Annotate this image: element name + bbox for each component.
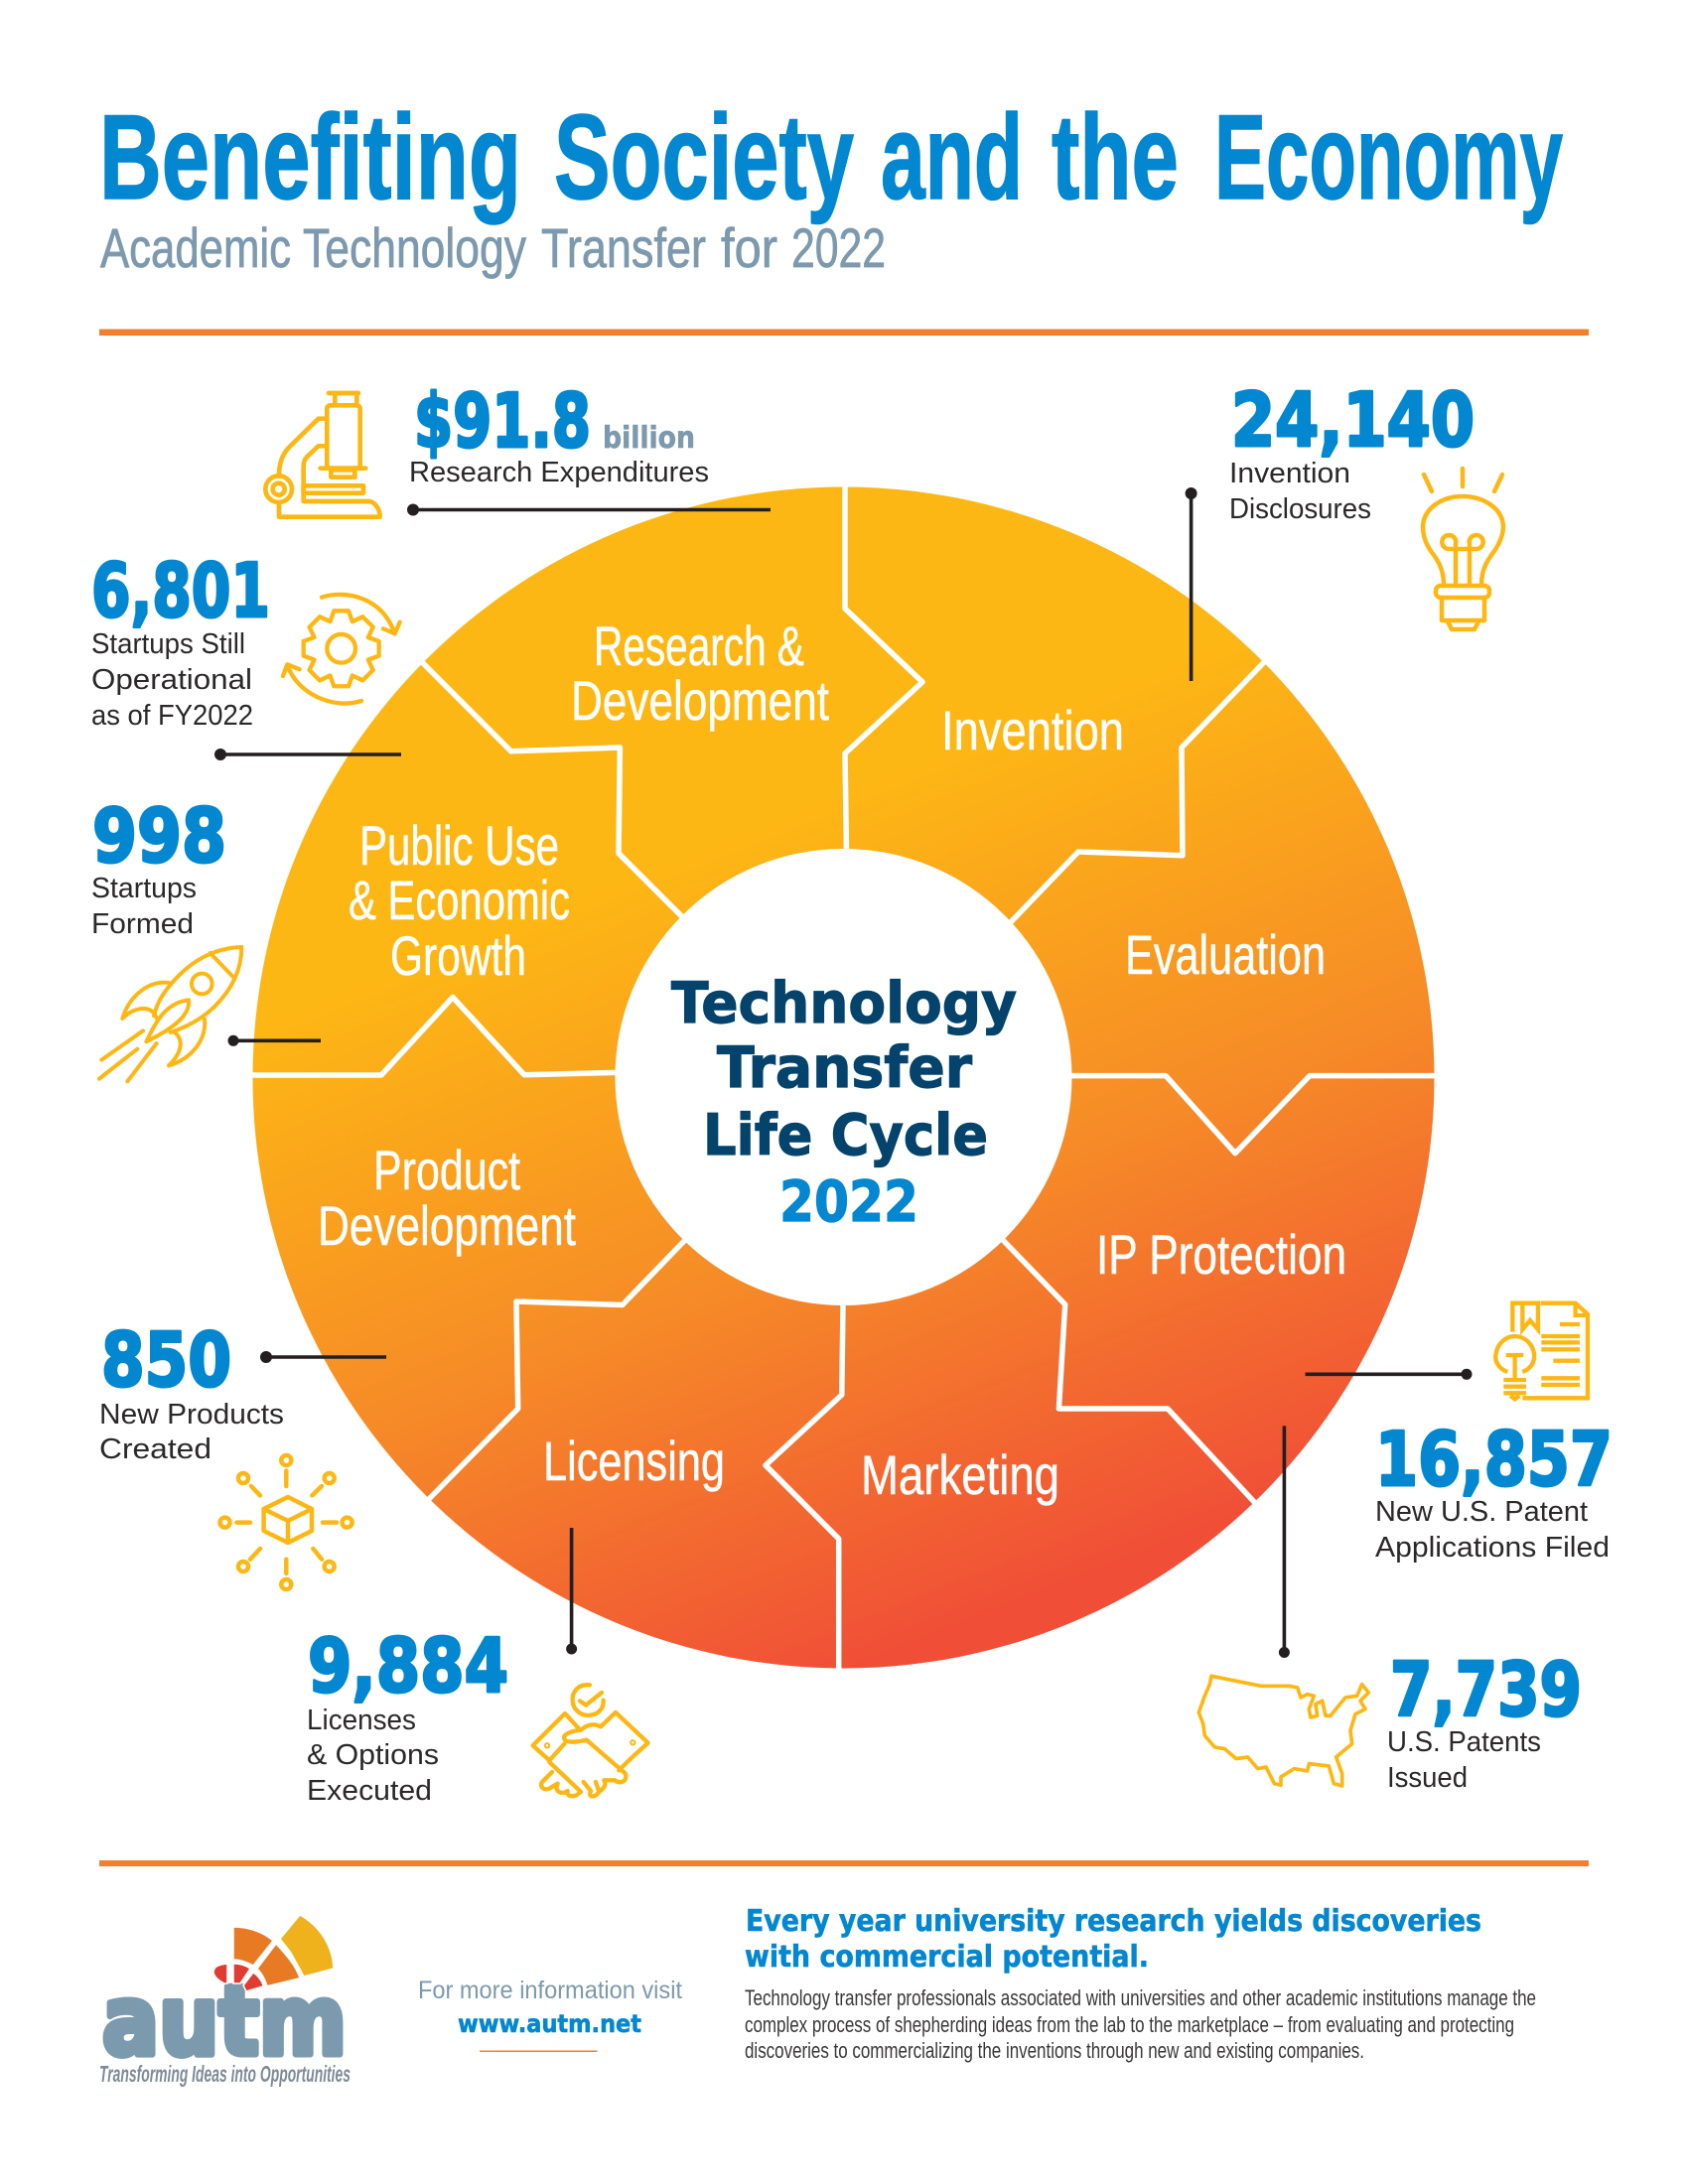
stat: new patent applications: Applications Filed [1375, 1532, 1610, 1564]
bottom divider [99, 1860, 1589, 1866]
subtitle: Academic [100, 216, 291, 279]
stat: new products created: 850 [101, 1316, 231, 1404]
footer paragraph [745, 1985, 1536, 2063]
center heading [671, 971, 1017, 1235]
stat: startups formed: Formed [91, 908, 194, 940]
icon: patent document with bulb [1495, 1303, 1588, 1399]
stage: public use and economic growth [349, 814, 570, 987]
title: the [1052, 89, 1179, 224]
stat: licenses and options: Licenses [307, 1705, 416, 1736]
stage: product development: Product [373, 1139, 520, 1201]
stage: licensing: Licensing [543, 1430, 725, 1492]
stat: new patent applications: New U.S. Patent [1375, 1496, 1588, 1528]
stat: new patent applications: 16,857 [1375, 1416, 1613, 1503]
stat: startups still operational: Startups Still [91, 628, 245, 660]
stat: licenses and options: Executed [307, 1775, 432, 1807]
stat: patents issued: 7,739 [1390, 1646, 1582, 1733]
stat: invention disclosures: Invention [1229, 458, 1350, 489]
stat: new products created: New Products [99, 1399, 284, 1431]
stage: invention: Invention [941, 699, 1124, 761]
leader: patent applications [1305, 1369, 1472, 1380]
stage: research and development [571, 614, 829, 732]
stat: licenses and options: 9,884 [308, 1622, 508, 1709]
leader: new products created [260, 1351, 386, 1363]
stat: startups still operational: as of FY2022 [91, 700, 253, 732]
stat: research expenditures: billion [603, 421, 695, 456]
logo wordmark: autm [102, 1966, 347, 2077]
title: Benefiting [99, 89, 521, 224]
stat: startups formed: 998 [92, 792, 226, 880]
leader: invention disclosures [1186, 487, 1197, 681]
icon: handshake [533, 1685, 648, 1796]
stat: invention disclosures: Disclosures [1229, 493, 1371, 525]
leader: patents issued [1279, 1426, 1290, 1658]
title: Society [554, 89, 854, 224]
stage: public use and economic growth: Growth [390, 924, 526, 987]
center heading: Life Cycle [703, 1103, 988, 1168]
stat: research expenditures [409, 377, 709, 488]
stat: research expenditures: Research Expenditures [409, 457, 709, 488]
stat: startups formed: Startups [91, 873, 197, 904]
icon: microscope [265, 393, 380, 517]
stage: research and development: Research & [594, 614, 804, 677]
center heading: 2022 [779, 1169, 918, 1235]
footer statement: Every year university research yields discoveries [746, 1904, 1481, 1939]
more information: For more information visit [418, 1977, 682, 2004]
footer paragraph: discoveries to commercializing the inventions through new and existing companies. [745, 2038, 1364, 2063]
stat: invention disclosures [1229, 376, 1475, 525]
stat: licenses and options [307, 1622, 508, 1807]
icon: gear with cycle arrows [283, 595, 400, 704]
footer statement: with commercial potential. [745, 1940, 1149, 1975]
title: and [881, 89, 1023, 224]
stat: licenses and options: & Options [307, 1739, 439, 1771]
icon: rocket [99, 947, 241, 1081]
stat: invention disclosures: 24,140 [1231, 376, 1475, 464]
icon: USA map [1198, 1676, 1368, 1786]
stat: patents issued: Issued [1387, 1762, 1468, 1794]
subtitle [100, 216, 886, 279]
logo tagline: Transforming Ideas into Opportunities [99, 2061, 351, 2087]
subtitle: for [721, 216, 777, 279]
stage: IP protection: IP Protection [1096, 1223, 1346, 1286]
footer logo [99, 1915, 351, 2087]
stat: patents issued: U.S. Patents [1387, 1726, 1541, 1758]
life cycle wheel [249, 484, 1437, 1671]
stat: startups still operational: Operational [91, 664, 252, 696]
stat: patents issued [1387, 1646, 1582, 1794]
logo mark [213, 1915, 334, 1991]
stage: public use and economic growth: Public Use [359, 814, 559, 877]
stage: public use and economic growth: & Economic [349, 869, 570, 931]
icon: cube with nodes [220, 1455, 352, 1589]
center heading: Technology [671, 971, 1017, 1036]
subtitle: Technology [303, 216, 526, 279]
wheel disc [252, 486, 1434, 1668]
leader: startups still operational [214, 749, 401, 760]
stat: research expenditures: $91.8 [414, 377, 591, 465]
stat: new products created: Created [99, 1433, 211, 1465]
title [99, 89, 1563, 224]
center circle [616, 849, 1072, 1305]
icon: light bulb [1423, 469, 1503, 629]
more information: www.autm.net [458, 2009, 641, 2038]
stat: startups still operational [91, 547, 270, 732]
stage: product development [318, 1139, 576, 1257]
stat: new products created [99, 1316, 284, 1465]
leader: startups formed [228, 1035, 321, 1046]
stage: research and development: Development [571, 669, 829, 732]
top divider [99, 330, 1589, 336]
footer statement [745, 1904, 1481, 1975]
wheel segment dividers [249, 484, 1437, 1671]
subtitle: Transfer [541, 216, 706, 279]
center heading: Transfer [717, 1035, 972, 1101]
stage: marketing: Marketing [861, 1443, 1059, 1506]
stat: startups still operational: 6,801 [91, 547, 270, 634]
subtitle: 2022 [791, 216, 886, 279]
stage: evaluation: Evaluation [1125, 923, 1326, 986]
stage: product development: Development [318, 1194, 576, 1257]
more information [418, 1977, 682, 2052]
stat: new patent applications [1375, 1416, 1613, 1564]
leader: research expenditures [407, 504, 771, 516]
stat: startups formed [91, 792, 226, 940]
leader: licenses and options [566, 1528, 577, 1654]
